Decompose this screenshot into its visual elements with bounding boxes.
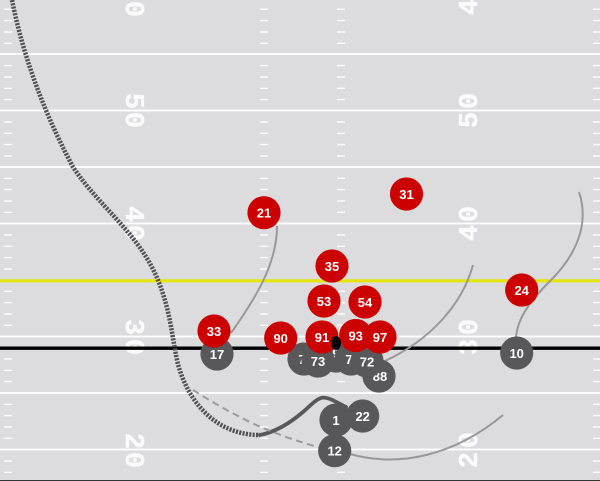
left yard numbers: 3 — [117, 319, 147, 335]
left yard numbers: 0 — [117, 225, 147, 241]
offense players: 22 — [355, 409, 370, 424]
left yard numbers: 0 — [117, 339, 147, 355]
route: slot receiver — [385, 265, 473, 361]
defense players: 54 — [358, 295, 373, 310]
left yard numbers: 0 — [117, 1, 147, 17]
right yard numbers: 0 — [456, 93, 486, 109]
left yard numbers: 0 — [117, 452, 147, 468]
right yard numbers: 3 — [456, 339, 486, 355]
left yard numbers: 5 — [117, 93, 147, 109]
route: dashed pass path — [193, 390, 318, 447]
defense players: 93 — [348, 328, 363, 343]
bottom edge — [0, 480, 600, 481]
defense players: 24 — [514, 283, 530, 298]
offense players: 88 — [373, 369, 387, 384]
left yard numbers: 2 — [117, 433, 147, 449]
route: right receiver — [516, 192, 583, 340]
defense players: 97 — [373, 330, 387, 345]
route: dotted quarterback path — [12, 0, 260, 435]
football — [331, 336, 341, 350]
offense players: 12 — [327, 444, 342, 458]
offense players: 7 — [345, 352, 353, 367]
defense players: 91 — [315, 330, 329, 345]
offense players: 73 — [311, 354, 325, 369]
offense players: 1 — [332, 413, 340, 428]
first down line — [0, 279, 600, 282]
right yard numbers: 2 — [456, 452, 486, 468]
right yard numbers: 0 — [456, 432, 486, 448]
left yard numbers — [117, 1, 147, 468]
right yard numbers: 0 — [456, 206, 486, 222]
offense players — [200, 336, 533, 467]
right yard numbers: 0 — [456, 319, 486, 335]
defense players: 33 — [207, 324, 221, 339]
defense players: 21 — [257, 206, 271, 220]
right yard numbers: 5 — [456, 112, 486, 128]
offense players: 72 — [360, 354, 374, 370]
route: running back — [350, 415, 503, 459]
defense players — [197, 177, 538, 355]
route: solid dark scramble path — [260, 398, 346, 435]
defense players: 53 — [317, 294, 331, 309]
offense players: 7 — [298, 352, 306, 367]
offense players: 17 — [210, 347, 224, 362]
offense players: 9 — [332, 346, 340, 361]
route: left receiver — [231, 226, 277, 333]
offense players: 10 — [509, 346, 524, 361]
left yard numbers: 0 — [117, 112, 147, 128]
line of scrimmage — [0, 346, 600, 350]
defense players: 31 — [399, 187, 414, 202]
defense players: 35 — [325, 259, 339, 274]
right yard numbers: 4 — [456, 225, 486, 241]
defense players: 90 — [273, 331, 288, 346]
left yard numbers: 4 — [117, 206, 147, 222]
right yard numbers — [456, 0, 486, 468]
